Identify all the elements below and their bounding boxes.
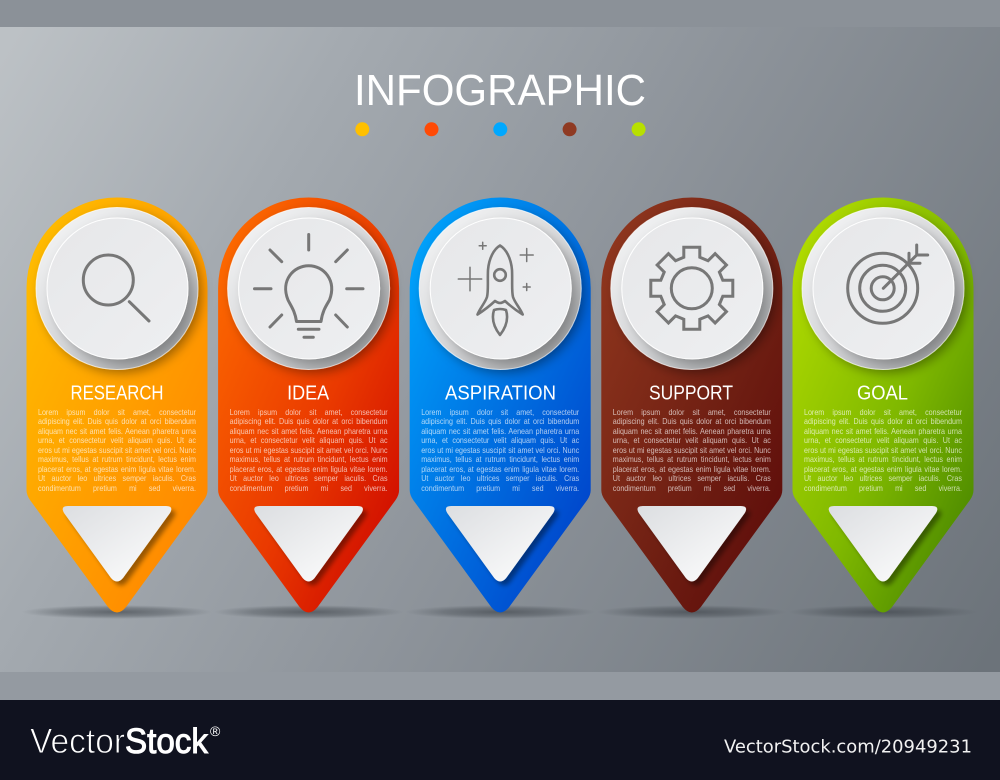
logo: VectorStock: Stock <box>125 722 208 761</box>
body text <box>230 408 390 496</box>
image id: VectorStock.com/20949231 <box>724 737 972 758</box>
panel: support <box>597 198 787 619</box>
logo: VectorStock <box>30 722 221 761</box>
pin shape <box>792 198 974 613</box>
heading: SUPPORT <box>649 382 733 404</box>
logo: VectorStock: ® <box>210 723 221 739</box>
panel: idea <box>214 198 404 619</box>
logo: VectorStock: Vector <box>30 722 125 761</box>
footer bar <box>0 700 1000 780</box>
button <box>228 208 390 370</box>
pin shape <box>410 198 591 613</box>
heading: GOAL <box>857 382 908 404</box>
triangle <box>446 506 555 582</box>
heading: ASPIRATION <box>445 382 556 404</box>
panel: goal <box>788 198 978 619</box>
panel: aspiration <box>405 198 595 619</box>
pin shape <box>601 198 782 613</box>
ground shadow <box>405 605 595 619</box>
body text <box>421 408 581 496</box>
heading: IDEA <box>287 382 330 404</box>
icon: magnifying glass <box>83 255 149 321</box>
icon: light bulb <box>254 234 363 337</box>
colored dots row <box>355 122 646 136</box>
icon: target with arrow <box>848 245 928 323</box>
ground shadow <box>214 605 404 619</box>
button <box>419 208 581 370</box>
triangle <box>63 506 171 582</box>
button <box>36 208 198 370</box>
triangle <box>254 506 363 582</box>
ground shadow <box>22 605 212 619</box>
ground shadow <box>788 605 978 619</box>
pin shape <box>26 198 208 613</box>
ground shadow <box>597 605 787 619</box>
button <box>802 208 964 370</box>
triangle <box>829 506 937 582</box>
pin shape <box>218 198 399 613</box>
title: INFOGRAPHIC <box>354 67 646 115</box>
panel: research <box>22 198 212 619</box>
icon: rocket <box>458 242 533 335</box>
body text <box>613 408 773 496</box>
triangle <box>637 506 746 582</box>
button <box>611 208 773 370</box>
body text <box>38 408 198 496</box>
heading: RESEARCH <box>70 382 164 404</box>
body text <box>804 408 964 496</box>
icon: gear <box>651 247 733 329</box>
